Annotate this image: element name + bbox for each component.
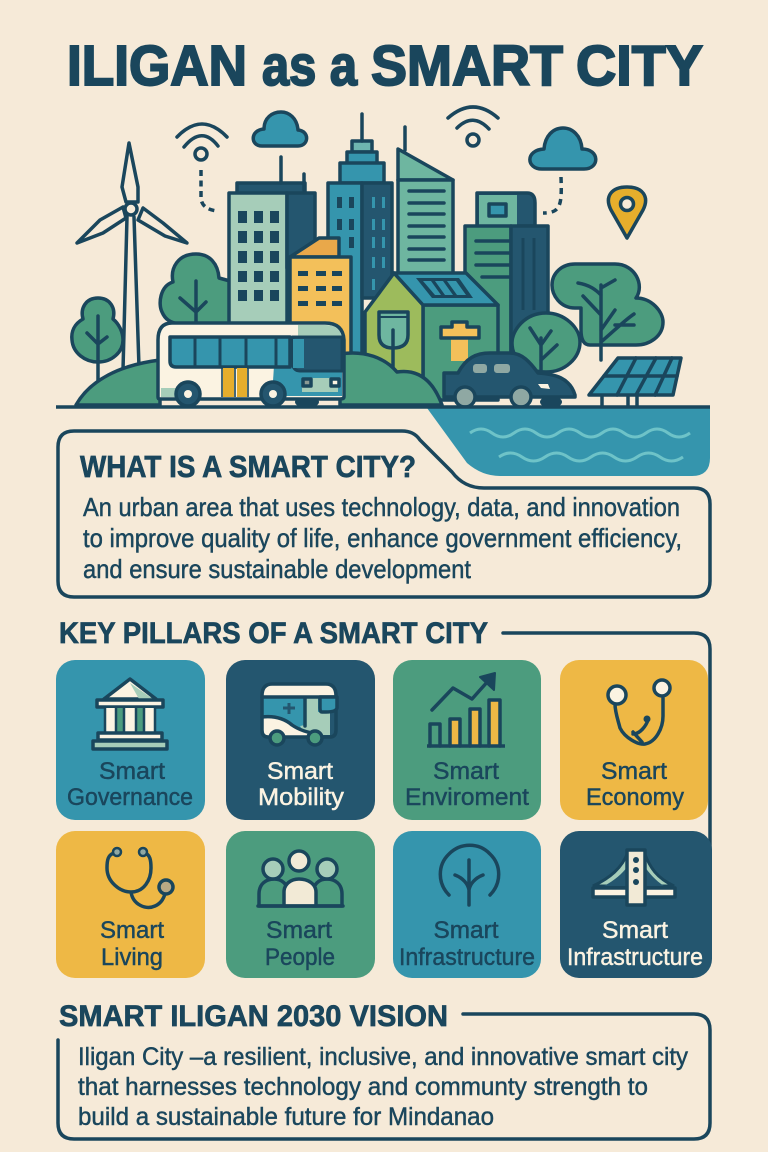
label: Infrastructure (399, 944, 535, 971)
panel: vision (58, 1000, 710, 1139)
icon: location pin (608, 187, 646, 238)
label: Smart (99, 758, 165, 785)
icon: cloud right (530, 128, 596, 213)
label: Infrastructure (567, 944, 703, 971)
icon: bridge (593, 850, 675, 905)
label: Smart (266, 917, 332, 944)
label: Smart (434, 917, 499, 944)
title: SMART (371, 34, 563, 98)
label: Smart (100, 917, 164, 944)
building: right office block (465, 193, 548, 376)
label: Mobility (258, 784, 344, 811)
icon: group of people (258, 851, 343, 906)
icon: bus (262, 684, 337, 745)
tile: smart infrastructure (tree) (393, 831, 541, 978)
label: Living (101, 944, 163, 971)
icon: bar chart with arrow (427, 673, 505, 746)
icon: wind turbine (77, 143, 187, 370)
title: as a (262, 34, 358, 98)
label (265, 917, 335, 971)
text: vision statement: that harnesses technology and communty strength to (78, 1073, 648, 1101)
icon: solar panel (589, 358, 681, 407)
icon: round tree behind car (512, 313, 580, 372)
label: Smart (267, 758, 333, 785)
tile: smart economy (560, 660, 708, 820)
ground line (56, 405, 710, 409)
icon: stethoscope (107, 848, 173, 907)
label (399, 917, 535, 971)
icon: stethoscope (608, 680, 670, 744)
tile: smart people (226, 831, 375, 978)
label: Economy (586, 784, 684, 811)
text: definition (83, 492, 682, 584)
tile: smart governance (56, 660, 205, 820)
label: Smart (601, 758, 667, 785)
building: green house with solar roof (365, 273, 498, 400)
icon: bus (158, 323, 344, 408)
title: ILIGAN (67, 34, 247, 98)
title: CITY (576, 34, 703, 98)
label (258, 758, 344, 811)
text: definition: to improve quality of life, enhance government efficiency, (83, 523, 682, 553)
building: pale green office (229, 157, 315, 343)
illustration: smart city skyline (56, 107, 710, 476)
text: definition: and ensure sustainable development (83, 554, 472, 584)
tile: smart environment (393, 660, 541, 820)
tile: smart living (56, 831, 205, 978)
title (67, 34, 703, 98)
building: blue tower (328, 114, 392, 363)
icon: car (444, 353, 575, 408)
connector line: key pillars (503, 633, 710, 865)
label: Enviroment (405, 784, 529, 811)
icon: wifi signal right (448, 107, 498, 146)
text: definition: An urban area that uses technology, data, and innovation (83, 492, 680, 522)
panel: what is a smart city (58, 431, 710, 597)
heading: key pillars: KEY PILLARS OF A SMART CITY (59, 617, 488, 650)
text: vision statement: Iligan City –a resilient, inclusive, and innovative smart city (78, 1043, 688, 1071)
label: Smart (602, 917, 668, 944)
water (427, 408, 710, 476)
icon: tree in circle (440, 845, 499, 905)
icon: wifi signal left (177, 124, 227, 211)
hill: central (340, 353, 442, 405)
heading: what is a smart city: WHAT IS A SMART CITY? (80, 449, 416, 484)
label: People (265, 944, 335, 971)
text: vision statement: build a sustainable future for Mindanao (78, 1103, 494, 1131)
icon: big right tree (552, 264, 663, 360)
tile: smart infrastructure (bridge) (560, 831, 712, 978)
label (567, 917, 703, 971)
hill: left (76, 360, 160, 405)
icon: government building (93, 679, 167, 749)
label: Smart (433, 758, 499, 785)
label (405, 758, 529, 811)
icon: cloud left (253, 112, 307, 146)
text: vision statement (78, 1043, 688, 1131)
building: green angled tower (398, 127, 453, 280)
label: Governance (67, 784, 193, 811)
building: yellow block (290, 238, 351, 367)
icon: large tree behind building (160, 254, 230, 326)
label (67, 758, 193, 811)
label (100, 917, 164, 971)
heading: vision: SMART ILIGAN 2030 VISION (59, 1000, 448, 1033)
tile: smart mobility (226, 660, 375, 820)
icon: small left tree (72, 298, 123, 383)
label (586, 758, 684, 811)
